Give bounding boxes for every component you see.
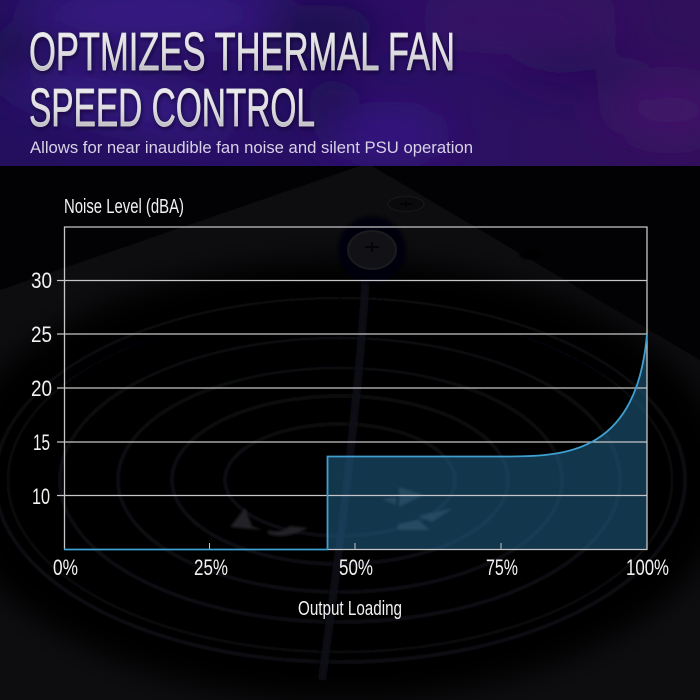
noise level chart [57,227,647,550]
x axis labels: 75% [486,555,518,580]
y axis labels: 20 [31,376,52,401]
y axis labels [31,268,52,509]
y axis labels: 10 [32,484,50,509]
logo mark [230,508,308,536]
background: dark PSU photo [0,166,700,700]
icon: fan hub screw [338,216,406,284]
x axis labels: 0% [53,555,78,580]
x axis labels: 25% [194,555,228,580]
x axis labels: 100% [626,555,669,580]
y axis title: Noise Level (dBA) [64,196,184,218]
title: OPTMIZES THERMAL FAN [29,22,455,82]
y axis labels: 25 [31,322,52,347]
y axis labels: 15 [33,430,50,455]
x axis title: Output Loading [298,598,402,620]
x axis labels: 50% [339,555,373,580]
subtitle: Allows for near inaudible fan noise and silent PSU operation [30,138,473,157]
noise curve [64,334,647,550]
y axis labels: 30 [31,268,52,293]
fan hub shapes [382,487,453,530]
grid lines and y ticks [57,280,647,549]
title: SPEED CONTROL [29,78,315,138]
area under noise curve [328,334,647,550]
icon: case screw [388,196,424,212]
header banner [0,0,700,166]
x axis labels [53,555,669,580]
plot frame [64,227,647,550]
title [29,22,455,138]
